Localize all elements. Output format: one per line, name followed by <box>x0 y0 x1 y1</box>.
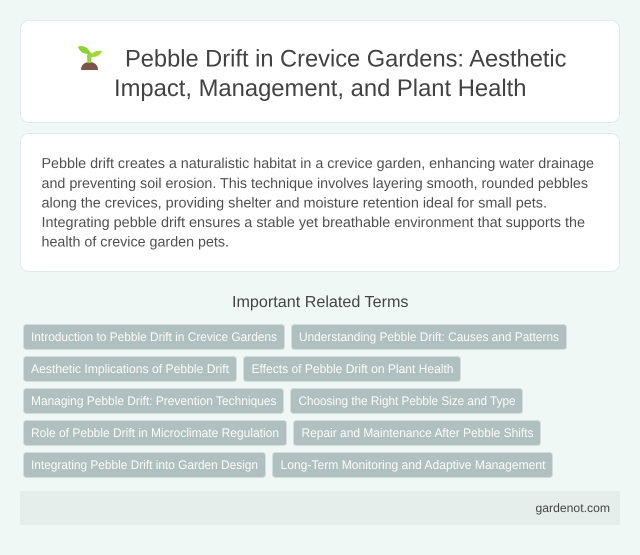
text block: description: and preventing soil erosion. This technique involves layering smooth, rounded pebbles <box>42 176 588 192</box>
heading: important related terms: Important Related Terms <box>232 294 408 311</box>
text block: description: along the crevices, providing shelter and moisture retention ideal for small pets. <box>42 196 547 212</box>
footer <box>20 491 620 525</box>
text block: description: health of crevice garden pets. <box>42 234 229 250</box>
panel: description card <box>20 134 620 272</box>
tag <box>272 452 552 478</box>
tag <box>24 324 284 350</box>
tag list <box>24 324 566 478</box>
text block: description <box>42 156 594 250</box>
tag <box>244 356 460 382</box>
tag: Choosing the Right Pebble Size and Type <box>298 394 516 408</box>
title <box>114 46 566 102</box>
tag: Introduction to Pebble Drift in Crevice Gardens <box>31 330 277 344</box>
tag <box>24 452 266 478</box>
title: Impact, Management, and Plant Health <box>114 75 526 102</box>
text block: description: Pebble drift creates a naturalistic habitat in a crevice garden, enhancing water drainage <box>42 156 594 172</box>
tag <box>24 388 284 414</box>
tag: Understanding Pebble Drift: Causes and Patterns <box>299 330 559 344</box>
tag <box>294 420 540 446</box>
text block: description: Integrating pebble drift ensures a stable yet breathable environment that supports the <box>42 215 585 231</box>
tag: Role of Pebble Drift in Microclimate Regulation <box>31 426 279 440</box>
tag: Long-Term Monitoring and Adaptive Management <box>280 458 546 472</box>
tag: Effects of Pebble Drift on Plant Health <box>252 362 454 376</box>
tag: Aesthetic Implications of Pebble Drift <box>31 362 229 376</box>
panel: title card <box>20 20 620 122</box>
tag <box>292 324 566 350</box>
tag <box>290 388 522 414</box>
tag: Integrating Pebble Drift into Garden Design <box>31 458 258 472</box>
tag <box>24 356 236 382</box>
tag: Managing Pebble Drift: Prevention Techniques <box>31 394 276 408</box>
title: Pebble Drift in Crevice Gardens: Aesthetic <box>125 46 566 72</box>
icon: seedling <box>78 46 102 70</box>
footer: gardenot.com <box>536 501 610 515</box>
tag <box>24 420 286 446</box>
tag: Repair and Maintenance After Pebble Shifts <box>302 426 534 440</box>
